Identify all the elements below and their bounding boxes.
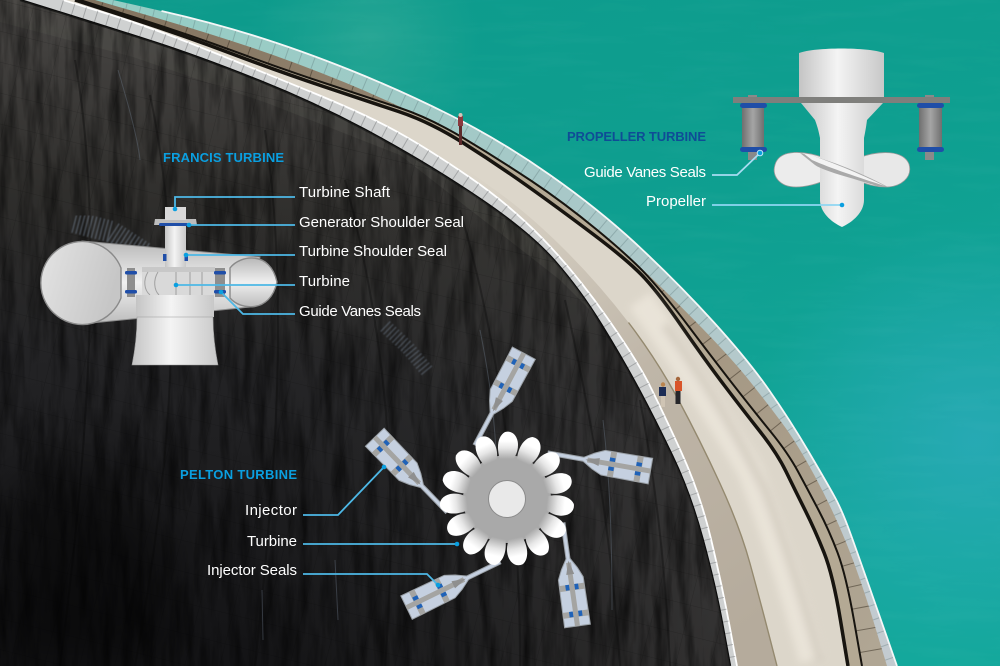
part: top plate xyxy=(733,97,950,103)
part: shaft and hub xyxy=(801,103,883,227)
callout: Turbine Shoulder Seal: Turbine Shoulder Seal xyxy=(299,243,447,260)
part: propeller blades xyxy=(774,152,910,187)
callout: Injector: Injector xyxy=(245,502,297,519)
part: slanted centre blade xyxy=(800,153,888,187)
callout: Turbine Shoulder Seal xyxy=(184,243,447,260)
part: guide vane columns xyxy=(740,95,944,160)
figure: walker with blue shirt xyxy=(659,382,666,407)
heading: Pelton turbine: PELTON TURBINE xyxy=(180,467,297,482)
callout: Injector Seals xyxy=(207,562,440,587)
callout: Guide Vanes Seals: Guide Vanes Seals xyxy=(299,303,421,320)
callout: Guide Vanes Seals xyxy=(219,290,421,320)
figure: upper walker xyxy=(458,113,463,145)
panel: Pelton turbine xyxy=(180,347,653,628)
callout: Turbine Shaft xyxy=(173,184,391,211)
callout: Generator Shoulder Seal xyxy=(187,214,464,231)
callout: Propeller: Propeller xyxy=(646,193,706,210)
diagram: runner wheel with buckets xyxy=(439,432,575,567)
callout: Turbine Shaft: Turbine Shaft xyxy=(299,184,391,201)
callout: Generator Shoulder Seal: Generator Shoulder Seal xyxy=(299,214,464,231)
callout: Injector xyxy=(245,465,386,519)
callout: Turbine xyxy=(174,273,350,290)
callout: Turbine: Turbine xyxy=(299,273,350,290)
figure: walker with orange shirt xyxy=(675,377,682,404)
callout: Injector Seals: Injector Seals xyxy=(207,562,297,579)
diagram: Francis turbine cross-section xyxy=(41,207,277,365)
callout: Guide Vanes Seals: Guide Vanes Seals xyxy=(584,164,706,181)
photo: dark concrete dam face with streaks xyxy=(0,0,760,666)
callout: Turbine xyxy=(247,533,459,550)
diagram: injectors xyxy=(365,347,653,628)
panel: Propeller turbine xyxy=(567,48,950,227)
heading: Propeller turbine: PROPELLER TURBINE xyxy=(567,129,706,144)
callout: Turbine: Turbine xyxy=(247,533,297,550)
part: generator housing xyxy=(799,48,884,97)
panel: Francis turbine xyxy=(41,150,464,365)
diagram: Propeller turbine xyxy=(733,48,950,227)
heading: Francis turbine: FRANCIS TURBINE xyxy=(163,150,284,165)
photo: walkers on the dam crest xyxy=(458,113,682,407)
callout: Propeller xyxy=(646,193,844,210)
callout: Guide Vanes Seals xyxy=(584,150,763,181)
